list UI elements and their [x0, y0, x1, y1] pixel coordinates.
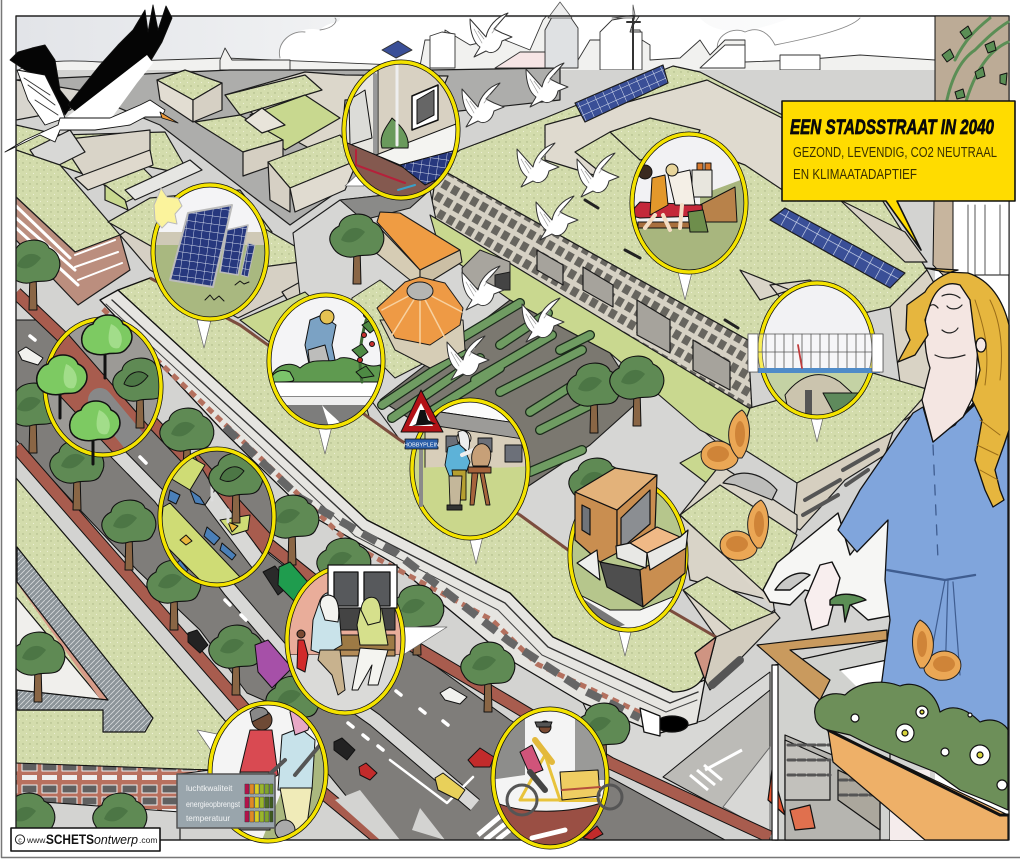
flower box on balcony — [815, 682, 1008, 840]
bubble: trees on the street — [37, 315, 167, 464]
hair and braid — [898, 268, 1009, 507]
heads on bench — [320, 595, 381, 625]
vehicles on the street — [18, 347, 603, 840]
back rows of buildings — [16, 68, 560, 318]
copyright logo box: c — [18, 838, 22, 844]
white curtain and hand — [763, 513, 895, 630]
wooden house — [575, 468, 688, 607]
right green roof with courtyard and slit facade — [680, 373, 930, 690]
sign label: HOBBYPLEIN — [404, 442, 439, 448]
plaza, lawn strips — [240, 190, 752, 555]
legend: air quality, energy, temperature — [177, 774, 275, 828]
left green strip with ramp — [16, 478, 227, 770]
legend: air quality, energy, temperature: energieopbrengst — [186, 800, 241, 809]
bubble: picnic on the roof — [628, 134, 746, 300]
bubble: solar panels — [150, 185, 270, 348]
stork — [5, 5, 178, 152]
woman's dress — [838, 393, 1008, 735]
cargo box and front wheel — [560, 770, 622, 809]
butterflies — [701, 410, 961, 680]
legend: air quality, energy, temperature: luchtkwaliteit — [186, 784, 233, 793]
road work warning sign — [401, 390, 443, 505]
street trees — [1, 240, 630, 859]
bubble: solar facade and pipes — [340, 41, 458, 200]
woman enjoying the air on the balcony — [838, 268, 1009, 735]
copyright logo box: ontwerp — [94, 832, 138, 847]
orange barn — [375, 212, 462, 288]
neck and face — [922, 277, 978, 442]
legend: air quality, energy, temperature: temperatuur — [186, 814, 230, 823]
copyright logo box — [11, 828, 160, 851]
building with climbing plants, top right — [933, 16, 1009, 285]
bubble: modular wooden house — [570, 468, 690, 656]
street with cycle paths, sidewalks and road — [16, 293, 770, 840]
copyright logo box: www. — [26, 835, 47, 845]
copyright logo box: SCHETS — [46, 832, 94, 847]
lower-left brick building — [16, 763, 210, 840]
balcony glass railing and view down — [757, 630, 930, 840]
orange domed pavilion — [377, 277, 465, 368]
bubble: cargo bike — [490, 708, 622, 850]
hobby garden with vegetable rows — [380, 300, 640, 487]
doves — [447, 13, 619, 380]
window above bench — [328, 565, 397, 608]
bubble: green lane and traffic — [158, 446, 276, 588]
bubble: old man sculpting — [410, 400, 530, 564]
bubble: two women on a bench — [285, 565, 447, 720]
grey sheds — [350, 250, 510, 378]
green roof — [118, 278, 716, 692]
main green roof building — [100, 278, 716, 736]
bubble: gardener on green roof — [268, 295, 390, 454]
copyright logo box: .com — [139, 835, 157, 845]
skyline towers above frame — [548, 2, 635, 18]
sports cage — [748, 334, 883, 373]
sky with clouds and skyline — [16, 0, 1009, 106]
facade — [100, 290, 705, 733]
courtyard trees — [330, 214, 664, 528]
bright green trees — [37, 315, 132, 464]
top right long apartment block with green roof — [430, 65, 935, 420]
callout: title and subtitle — [782, 101, 1015, 250]
callout subtitle line 2: EN KLIMAATADAPTIEF — [793, 166, 917, 183]
bubble: sports cage and water storage — [748, 283, 883, 442]
bubble: two women walking on cross trainers — [197, 703, 330, 845]
